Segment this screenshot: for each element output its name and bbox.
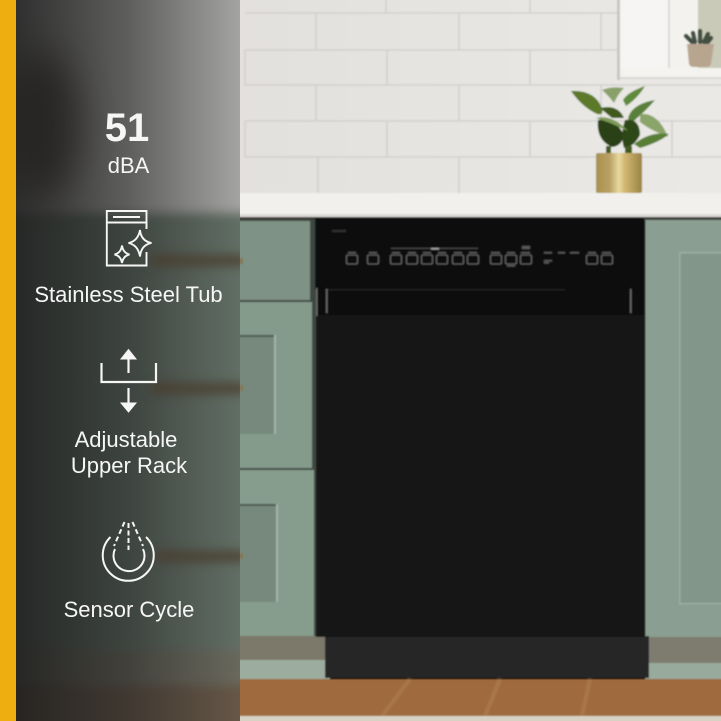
dishwasher (315, 218, 649, 678)
dishwasher door (316, 290, 644, 637)
green cabinet right (645, 220, 721, 637)
toe kick and base right (645, 637, 721, 684)
countertop (225, 193, 721, 220)
yellow accent bar (0, 0, 16, 721)
control labels (348, 246, 611, 266)
label: stainless steel tub: Stainless Steel Tub (34, 282, 223, 307)
icon: succulent in pot (686, 31, 714, 67)
stat: 51 dBA: dBA (108, 153, 150, 178)
label: sensor cycle: Sensor Cycle (64, 597, 194, 622)
label: adjustable upper rack (71, 427, 188, 478)
brand mark (332, 230, 346, 232)
window with sill (617, 0, 721, 80)
icon: adjustable upper rack (102, 350, 156, 412)
rug edge (225, 716, 721, 721)
icon: potted plant (571, 86, 669, 154)
blurred left panel (16, 0, 240, 721)
label: adjustable upper rack: Upper Rack (71, 453, 188, 478)
dishwasher control panel (315, 218, 644, 290)
blurred dark blotch (4, 50, 80, 200)
stat: 51 dBA (105, 106, 150, 178)
blurred handles (150, 255, 245, 562)
kitchen scene (225, 0, 721, 721)
control buttons (346, 255, 612, 264)
wood floor (225, 679, 721, 716)
label: adjustable upper rack: Adjustable (75, 427, 177, 452)
green cabinets left (225, 220, 316, 645)
dishwasher kick plate (325, 636, 649, 678)
stat: 51 dBA: 51 (105, 106, 149, 150)
kitchen wall (225, 0, 721, 200)
gold plant pot (596, 153, 642, 193)
toe kick and base left (225, 636, 330, 680)
icon: stainless steel tub (107, 211, 152, 266)
icon: sensor cycle (103, 522, 154, 581)
door handle ends (316, 288, 632, 316)
blurred backdrop (16, 0, 240, 721)
panel shading (16, 0, 240, 721)
